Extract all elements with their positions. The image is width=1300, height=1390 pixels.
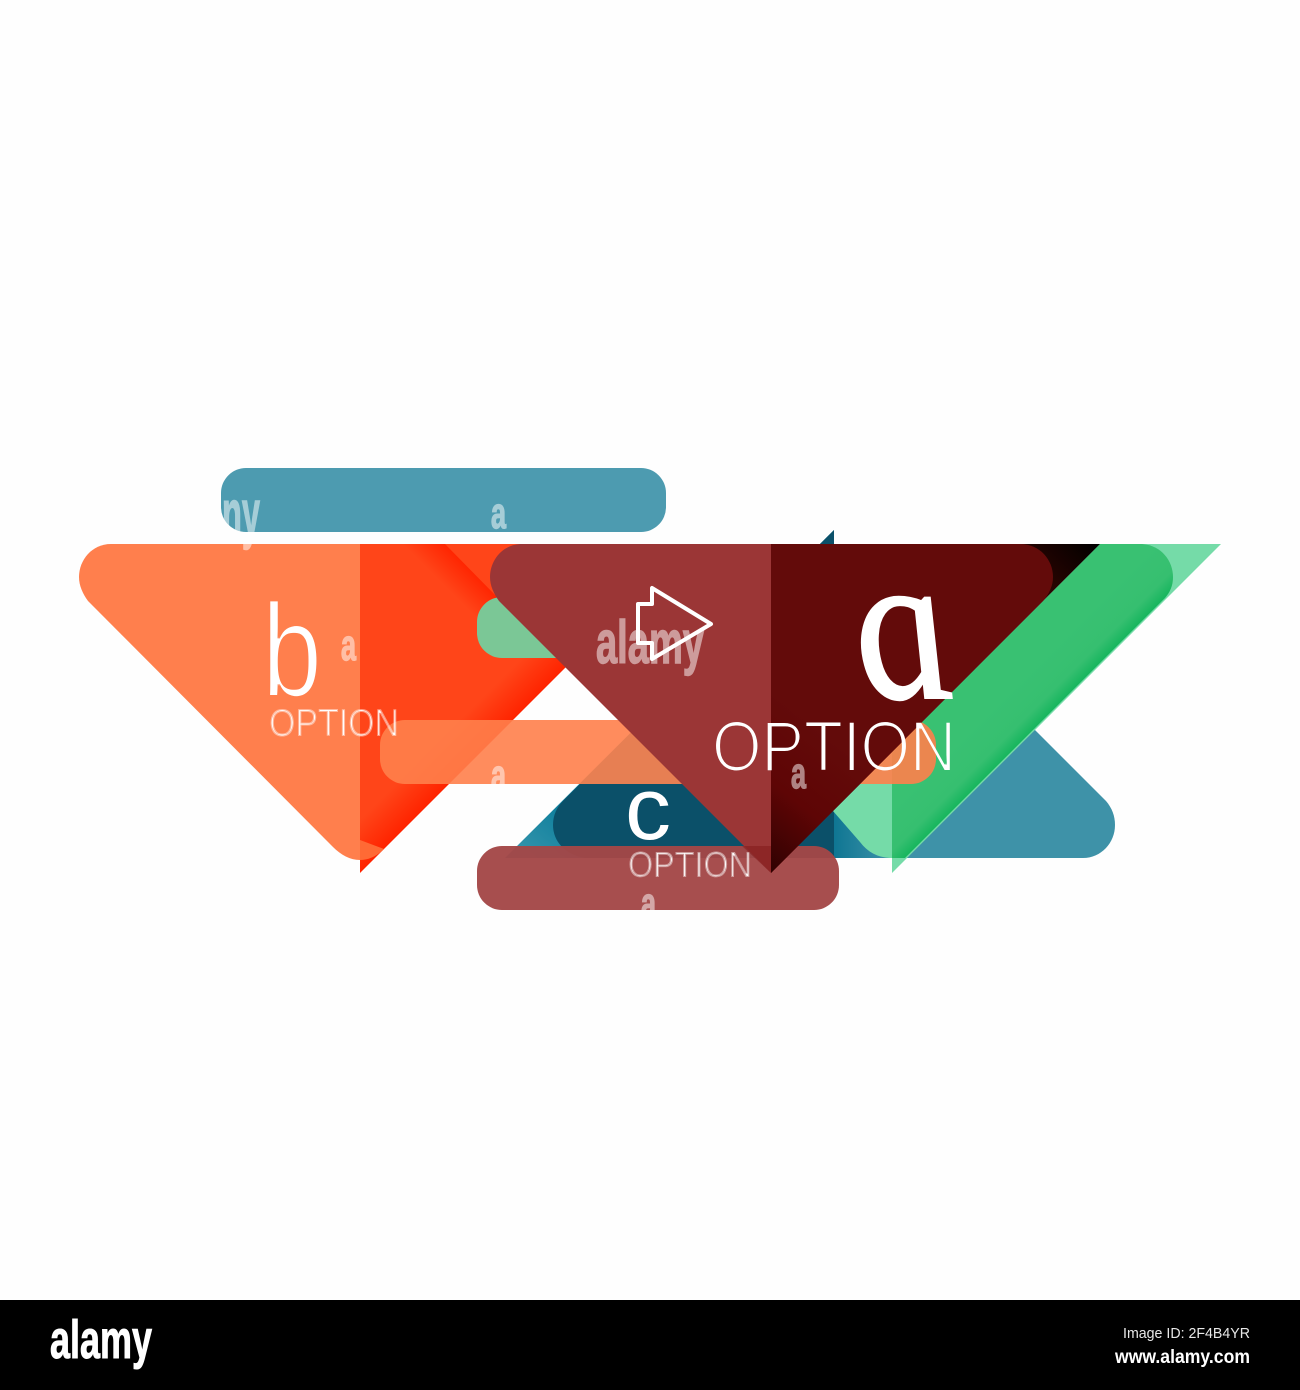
label: c option: c xyxy=(625,759,671,858)
label: b option: OPTION xyxy=(269,702,399,745)
label: c option: OPTION xyxy=(628,844,752,885)
panel: maroon triangle a xyxy=(490,544,1100,873)
watermark: alamy stamps: a xyxy=(491,489,506,538)
soft shadow under apex xyxy=(742,846,771,873)
orange rounded tip over red xyxy=(360,840,384,860)
pill: maroon bottom bar xyxy=(477,846,839,910)
pill: teal top bar xyxy=(221,468,666,532)
icon: outlined arrow xyxy=(638,588,711,659)
label: c option xyxy=(625,759,752,885)
footer image id: Image ID: 2F4B4YR xyxy=(1123,1325,1250,1342)
dark teal bar behind c xyxy=(553,784,834,858)
dark maroon rounded right half xyxy=(771,544,1053,873)
watermark: alamy stamps xyxy=(222,476,806,928)
watermark: alamy stamps: alamy xyxy=(596,609,704,676)
teal triangle left half xyxy=(505,530,834,858)
red fold beside the maroon triangle xyxy=(400,544,500,620)
watermark: alamy stamps: ny xyxy=(222,476,260,550)
label: a option xyxy=(712,507,977,787)
dark green rounded band xyxy=(892,544,1173,858)
watermark: alamy stamps: a xyxy=(641,879,656,928)
watermark: alamy stamps: a xyxy=(791,749,806,798)
maroon left half xyxy=(490,544,771,873)
panel: teal triangle c xyxy=(505,530,1115,858)
panel: green triangle xyxy=(833,544,1221,873)
teal triangle right half xyxy=(834,545,1115,858)
label: b option: b xyxy=(262,577,322,724)
label: a option: a xyxy=(817,507,977,745)
label: a option: OPTION xyxy=(712,708,956,787)
panel: orange triangle b xyxy=(79,544,689,873)
dark sharp right half xyxy=(771,544,1100,873)
footer url: www.alamy.com xyxy=(1114,1347,1250,1368)
footer bar xyxy=(0,1300,1300,1390)
watermark: alamy stamps: a xyxy=(341,621,356,670)
label: b option xyxy=(262,577,399,745)
pill: orange middle bar xyxy=(380,720,936,784)
light green sharp layer xyxy=(833,544,1221,873)
pill: green bar behind maroon triangle xyxy=(477,597,677,658)
footer logo: alamy xyxy=(50,1310,152,1370)
dark teal tip xyxy=(819,530,834,545)
watermark: alamy stamps: a xyxy=(491,751,506,800)
orange rounded left half xyxy=(79,544,360,860)
red sharp right half xyxy=(360,544,689,873)
